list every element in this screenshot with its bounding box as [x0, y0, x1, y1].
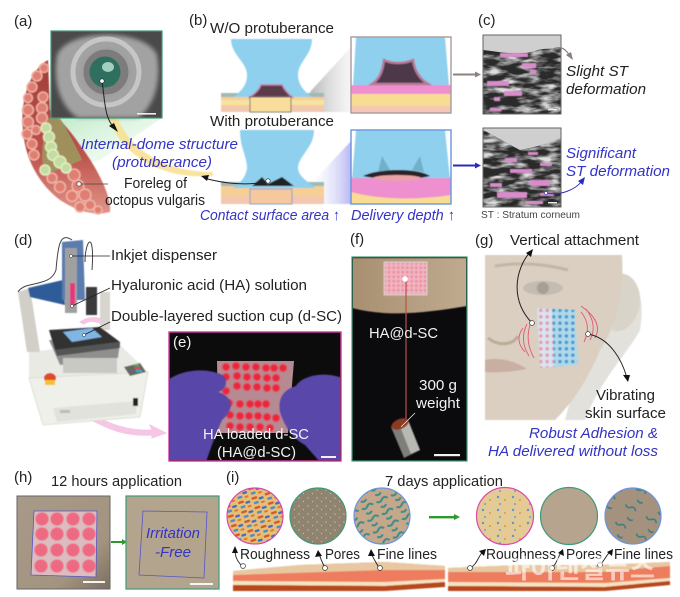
- label (b): (b): [189, 12, 207, 29]
- attach point: [402, 276, 408, 282]
- left glove: [168, 370, 231, 462]
- blue curved arrow: [544, 177, 585, 195]
- gantry pillars: [18, 288, 40, 352]
- heading: 7 days: 7 days application: [385, 473, 503, 490]
- control panel: [124, 363, 146, 376]
- heading: with protuberance: With protuberance: [210, 113, 334, 130]
- yellow connection band: [108, 118, 213, 176]
- scale bar: [321, 456, 336, 458]
- green highlighted section of arm: [42, 118, 82, 175]
- after: pores circle: [540, 488, 598, 544]
- label (c): (c): [478, 12, 496, 29]
- arm suckers: [22, 64, 102, 214]
- red rings: [222, 362, 287, 432]
- label: slight ST: Slight ST: [566, 63, 630, 80]
- panel i: 7 days application: [226, 469, 673, 591]
- panel h: 12 hours application: [14, 469, 219, 589]
- footnote: ST : Stratum corneum: [481, 209, 580, 221]
- label: ST deformation: ST deformation: [566, 163, 670, 180]
- label: d-SC: Double-layered suction cup (d-SC): [111, 308, 342, 325]
- photo background: [169, 332, 341, 461]
- label: octopus vulgaris: octopus vulgaris: [105, 192, 205, 209]
- blue arrow: [453, 162, 481, 168]
- label: HA loaded: HA loaded d-SC: [203, 426, 309, 443]
- tubes: [18, 238, 93, 292]
- label: roughness after: Roughness: [486, 546, 556, 563]
- green arrow: [111, 539, 127, 545]
- skin patch: [537, 308, 578, 368]
- panel d: inkjet machine: [14, 232, 342, 438]
- before: roughness circle: [227, 488, 283, 544]
- zoom lens: with protuberance: [351, 130, 451, 204]
- dispenser: [65, 248, 77, 313]
- label: inkjet dispenser: Inkjet dispenser: [111, 247, 217, 264]
- label: 300 g: 300 g: [419, 377, 457, 394]
- skin with patch photo: [17, 496, 110, 589]
- label: robust adhesion: Robust Adhesion &: [529, 425, 658, 442]
- label: fine lines after: Fine lines: [614, 546, 673, 563]
- label: HA solution: Hyaluronic acid (HA) solution: [111, 277, 307, 294]
- panel c: histology: [478, 12, 670, 221]
- green frame: [352, 257, 467, 461]
- label: free: -Free: [155, 544, 191, 561]
- skin after removal photo: [126, 496, 219, 589]
- green suckers: [40, 123, 71, 175]
- label: HA@d-SC: HA@d-SC: [369, 325, 438, 342]
- hanging string: [405, 279, 407, 420]
- heading: 12 hours: 12 hours application: [51, 473, 182, 490]
- zoom lens: without protuberance: [351, 37, 451, 113]
- eyebrow: [495, 264, 568, 270]
- label: vibrating: Vibrating: [596, 387, 655, 404]
- skin block after: [448, 562, 670, 591]
- right glove: [280, 375, 342, 462]
- label: skin surface: skin surface: [585, 405, 666, 422]
- machine base front: [29, 372, 148, 425]
- machine base top: [29, 342, 148, 378]
- leader: weight: [401, 413, 415, 427]
- pink spots: [34, 512, 96, 572]
- d-SC sheet: [217, 361, 294, 433]
- SEM inset image: [51, 31, 162, 118]
- label: deformation: deformation: [566, 81, 646, 98]
- cross-section with protuberance: [221, 130, 352, 204]
- label (g): (g): [475, 232, 493, 249]
- label (a): (a): [14, 13, 32, 30]
- arrow: vertical attachment: [517, 249, 534, 325]
- label: roughness before: Roughness: [240, 546, 310, 563]
- gantry blue carriage: [28, 280, 65, 305]
- watermark: 파이낸셜뉴스: [505, 554, 655, 584]
- label: vertical attachment: Vertical attachment: [510, 232, 640, 249]
- octopus arm: [22, 60, 110, 214]
- label: irritation: Irritation: [146, 525, 200, 542]
- leader: inkjet dispenser: [69, 254, 110, 258]
- label (d): (d): [14, 232, 32, 249]
- metal weight: [390, 416, 420, 458]
- arrow from protuberance to label: [201, 175, 270, 184]
- ear: [612, 273, 640, 331]
- face skin: [485, 255, 622, 420]
- scale bar: [434, 454, 460, 456]
- label (e): (e): [173, 334, 191, 351]
- grey curved arrow: [553, 48, 573, 60]
- machine: [18, 240, 148, 425]
- histology image: slight deformation: [483, 35, 561, 114]
- panel g: face with patch: [475, 232, 666, 460]
- grey arrow: [453, 72, 481, 78]
- label: fine lines before: Fine lines: [377, 546, 437, 563]
- panel b: suction cup comparison: [189, 12, 481, 224]
- label: pores before: Pores: [325, 546, 360, 563]
- label: delivery depth: Delivery depth ↑: [351, 207, 455, 224]
- vibration waves right: [581, 306, 598, 342]
- leader dots: [241, 563, 602, 570]
- label: internal-dome structure: Internal-dome structure: [81, 136, 238, 153]
- label: weight: weight: [415, 395, 461, 412]
- label: significant: Significant: [566, 145, 637, 162]
- face shadow: [565, 270, 642, 420]
- emergency button: [44, 373, 56, 383]
- lens frame top: [351, 37, 451, 113]
- HA syringe: [70, 283, 75, 305]
- label (f): (f): [350, 231, 364, 248]
- pink arrow to panel e: [80, 318, 166, 438]
- eye: [523, 281, 563, 295]
- label: pores after: Pores: [566, 546, 602, 563]
- after: roughness circle: [476, 488, 534, 544]
- before: fine lines circle: [354, 488, 410, 544]
- panel f: adhesion test photo: [350, 231, 467, 461]
- skin block before: [233, 562, 445, 591]
- d-SC array: [63, 328, 102, 342]
- after: fine lines circle: [605, 488, 661, 544]
- leaders: [235, 549, 611, 568]
- arrow: vibrating skin: [586, 332, 630, 382]
- label: foreleg: Foreleg of: [124, 175, 188, 192]
- stage plate: [49, 327, 120, 350]
- stage body: [49, 340, 120, 365]
- dark background: [352, 257, 467, 461]
- label (h): (h): [14, 469, 32, 486]
- nose: [488, 336, 518, 344]
- magenta frame: [169, 332, 341, 461]
- histology image: significant deformation: [483, 128, 561, 207]
- patch on arm: [384, 262, 427, 295]
- green arrow: [429, 514, 460, 520]
- green protuberance dome: [90, 56, 120, 88]
- cross-section without protuberance: [221, 39, 352, 112]
- label: HA delivered: HA delivered without loss: [488, 443, 659, 460]
- before: pores circle: [290, 488, 346, 544]
- label: protuberance: (protuberance): [112, 154, 212, 171]
- arrow from dome to label: [100, 79, 118, 132]
- green zoom wedge: [58, 118, 162, 165]
- forearm: [352, 258, 467, 313]
- heading: without protuberance: W/O protuberance: [210, 20, 334, 37]
- leader: d-SC: [82, 322, 110, 337]
- panel a: octopus foreleg: [14, 13, 238, 214]
- lips: [485, 359, 527, 372]
- label: HA@d-SC: (HA@d-SC): [217, 444, 296, 461]
- front recess: [53, 401, 137, 422]
- face: [485, 255, 642, 420]
- foreleg leader: [77, 182, 108, 186]
- vibration waves left: [519, 322, 534, 358]
- patch sheet: [31, 511, 97, 577]
- label (i): (i): [226, 469, 239, 486]
- lens frame bottom: [351, 130, 451, 204]
- leader arrowheads: [232, 546, 613, 557]
- leader: HA solution: [70, 288, 110, 308]
- side port: [133, 398, 138, 406]
- panel e: HA loaded d-SC photo: [168, 332, 342, 462]
- label: contact surface area: Contact surface area ↑: [200, 207, 340, 224]
